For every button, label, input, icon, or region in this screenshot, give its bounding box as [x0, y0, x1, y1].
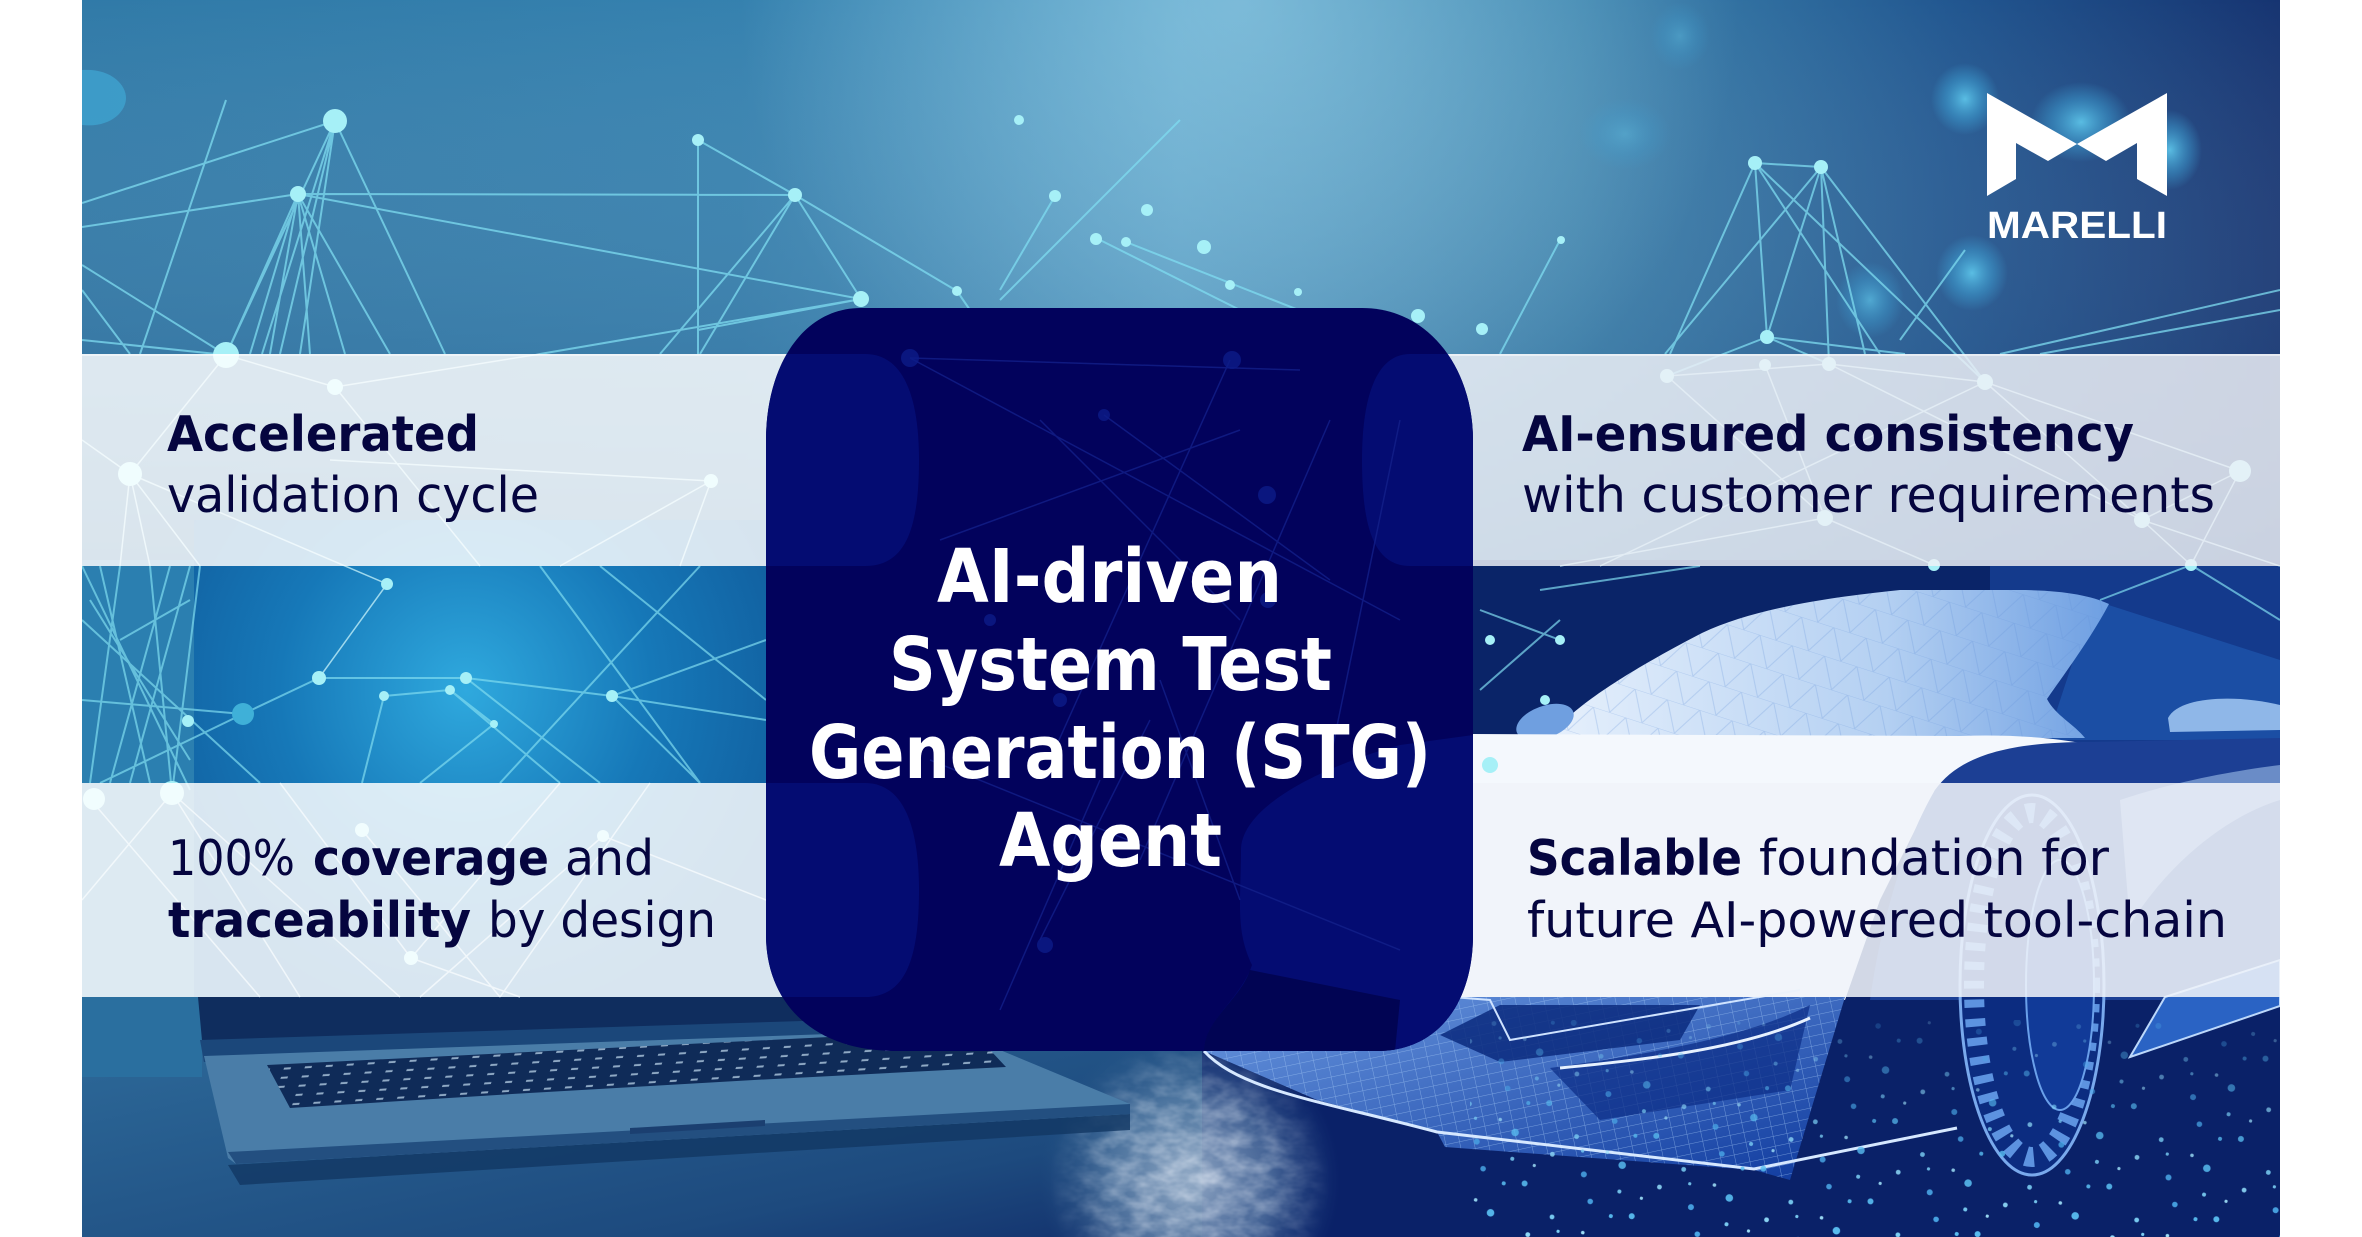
text block: AI-ensured consistency: AI-ensured consistency	[1522, 406, 2134, 463]
glow spots	[1579, 2, 2202, 338]
icon: Marelli M mark	[1987, 93, 2167, 196]
title	[809, 534, 1431, 884]
text block: scalable foundation: Scalable	[1527, 830, 1742, 887]
rocker panel	[2130, 960, 2280, 1057]
text block: AI-ensured consistency: with customer requirements	[1522, 467, 2215, 524]
windshield	[1551, 590, 2109, 738]
wheel	[1960, 795, 2104, 1175]
grille	[1440, 1005, 1700, 1062]
side streaks	[2120, 765, 2280, 925]
laptop screen bezel	[198, 997, 802, 1040]
trackpad notch	[630, 1120, 765, 1134]
title: System Test	[889, 622, 1332, 708]
panel: bottom left band	[82, 783, 802, 997]
text block: AI-ensured consistency	[1522, 406, 2215, 524]
title: Agent	[999, 798, 1222, 884]
car background	[1200, 560, 2280, 1237]
panel: top left band	[82, 354, 802, 566]
panel: top right band	[1440, 354, 2280, 566]
text block: scalable foundation: foundation for	[1759, 830, 2110, 887]
text block: coverage and traceability: traceability	[168, 892, 471, 949]
particles	[1470, 1020, 2280, 1237]
text block: scalable foundation: future AI-powered tool-chain	[1527, 892, 2227, 949]
text block: coverage and traceability: coverage	[313, 830, 549, 887]
background: sky gradient	[82, 0, 2280, 560]
text block: coverage and traceability: by design	[488, 892, 716, 949]
car	[1204, 590, 2280, 1180]
network lines and nodes	[82, 100, 2280, 997]
text block: accelerated validation cycle: validation cycle	[167, 467, 539, 524]
text block: coverage and traceability: and	[565, 830, 654, 887]
card dark car front	[1204, 970, 1400, 1051]
side window	[2047, 600, 2280, 740]
card faint network	[910, 358, 1400, 1010]
text block: scalable foundation	[1527, 830, 2227, 949]
keyboard	[267, 1037, 1006, 1108]
text block: coverage and traceability	[168, 830, 716, 949]
laptop shadow	[228, 1112, 1130, 1185]
text block: coverage and traceability: 100%	[168, 830, 295, 887]
text block: accelerated validation cycle: Accelerated	[167, 406, 479, 463]
lower lip lines	[1204, 1051, 1957, 1169]
road patch	[1062, 1051, 1326, 1237]
laptop and table	[82, 520, 1340, 1237]
panel: bottom right band	[1440, 783, 2280, 997]
card lighter notches	[766, 354, 1473, 1051]
hood	[1450, 734, 2090, 1000]
title: AI-driven	[937, 534, 1282, 620]
text block: accelerated validation cycle	[167, 406, 539, 524]
mirror	[2168, 699, 2280, 732]
panel: central rounded card	[766, 308, 1473, 1051]
wheel arch	[1870, 738, 2280, 1000]
logo: Marelli	[1987, 93, 2167, 247]
logo wordmark: MARELLI	[1987, 205, 2167, 247]
title: Generation (STG)	[809, 710, 1431, 796]
laptop base	[204, 1034, 1130, 1164]
bumper	[1204, 997, 1845, 1180]
